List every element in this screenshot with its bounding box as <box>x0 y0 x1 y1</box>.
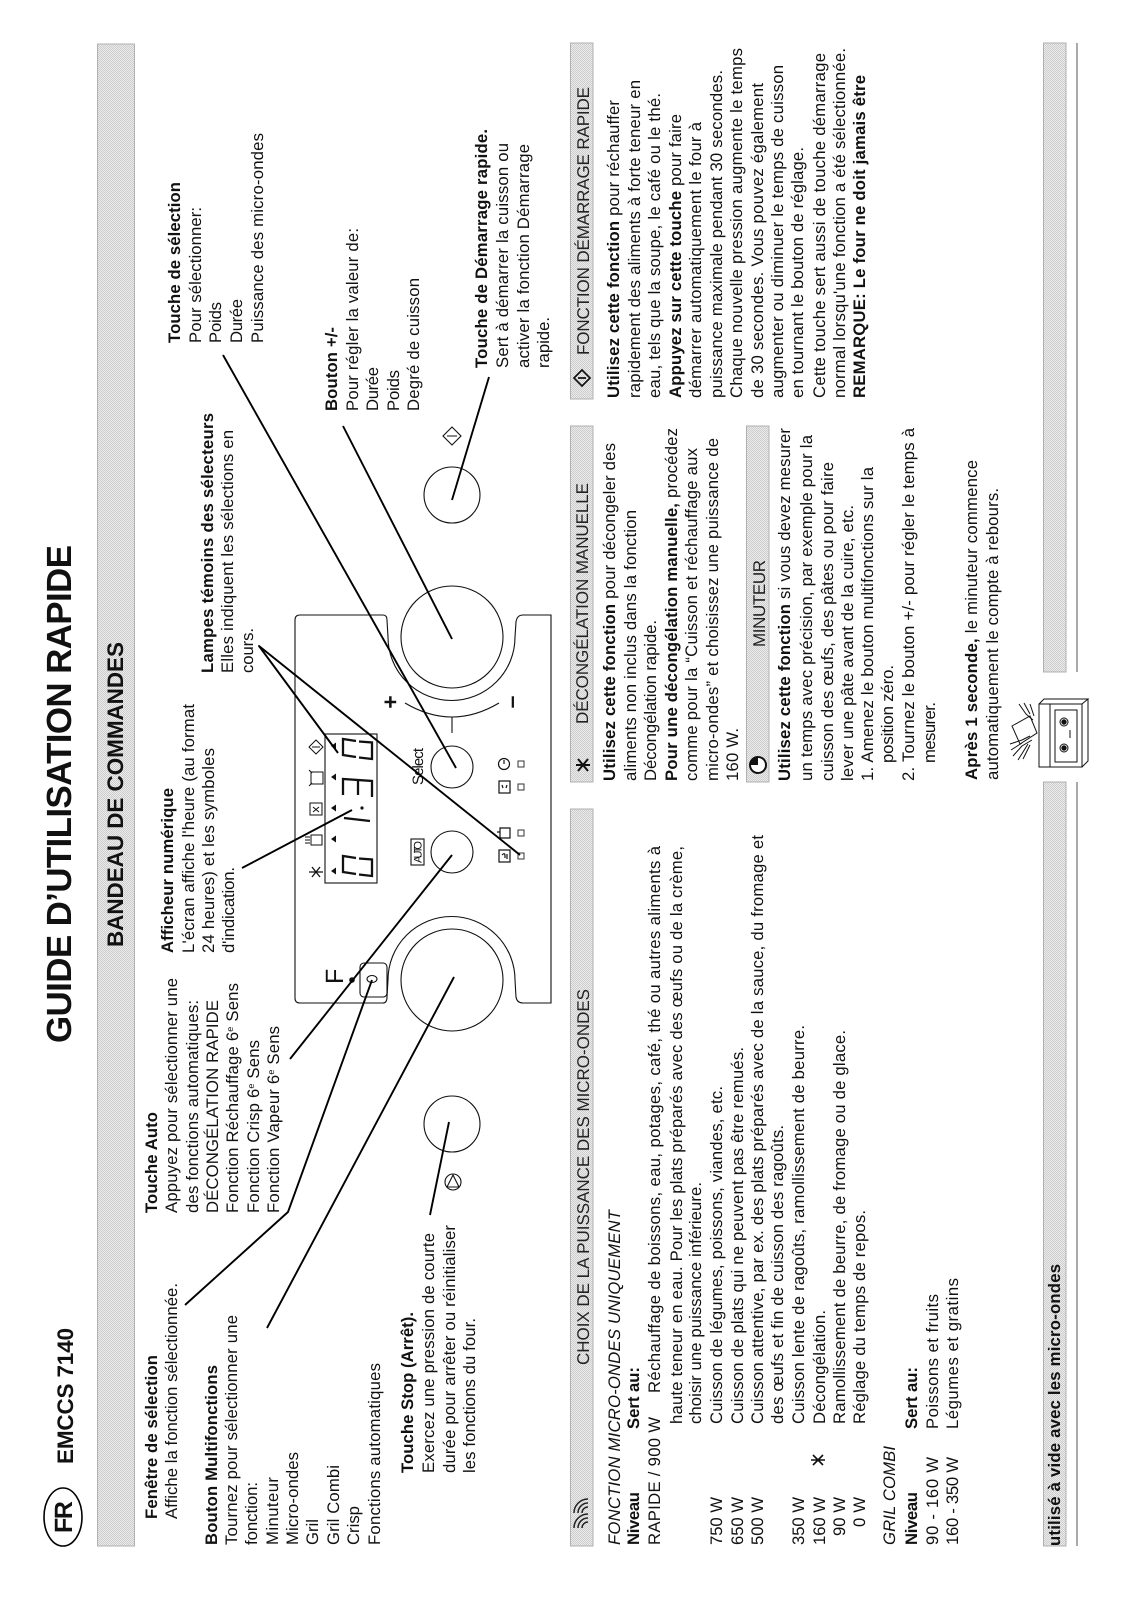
knob: bouton +/- <box>401 586 503 688</box>
text: touche de selection: Poids <box>206 302 225 343</box>
text: fonction demarrage rapide: eau, tels que la soupe, le café ou le thé. <box>645 93 664 398</box>
table: fonction micro-ondes uniquement: Cuisson de légumes, poissons, viandes, etc. <box>707 1086 726 1424</box>
table: fonction micro-ondes uniquement <box>605 835 869 1545</box>
icon: snowflake in table <box>811 1455 825 1465</box>
table: fonction micro-ondes uniquement: 750 W <box>707 1497 726 1545</box>
section bar: decongelation manuelle <box>570 426 593 782</box>
text: lampes temoins: Elles indiquent les sélections en <box>218 430 237 673</box>
table: fonction micro-ondes uniquement: haute teneur en eau. Pour les plats préparés avec des œufs ou de la crème, <box>667 846 686 1424</box>
table: fonction micro-ondes uniquement: Réchauffage de boissons, eau, potages, café, thé ou autres aliments à <box>645 845 664 1393</box>
text: touche de demarrage rapide: activer la fonction Démarrage <box>514 144 533 368</box>
text: bouton +/-: Pour régler la valeur de: <box>343 228 362 411</box>
text: touche de demarrage rapide: rapide. <box>534 317 553 368</box>
text: fonction demarrage rapide: rapidement des aliments à forte teneur en <box>625 80 644 398</box>
leader lines <box>185 355 520 1328</box>
title: GUIDE D’UTILISATION RAPIDE <box>40 545 79 1043</box>
table: gril combi: Niveau <box>902 1492 921 1545</box>
text: fonction demarrage rapide: augmenter ou diminuer le temps de cuisson <box>768 65 787 398</box>
model number: EMCCS 7140 <box>53 1328 78 1464</box>
text: minuteur: position zéro. <box>878 665 897 763</box>
table: gril combi: Poissons et fruits <box>923 1294 942 1429</box>
text: touche de selection: Touche de sélection <box>165 182 184 343</box>
section bar: fonction demarrage rapide <box>570 43 593 399</box>
badge: FR: FR <box>50 1501 78 1533</box>
text: touche stop: les fonctions du four. <box>460 1318 479 1473</box>
text: touche auto: Touche Auto <box>142 1112 161 1213</box>
text: minuteur: automatiquement le compte à rebours. <box>983 488 1002 780</box>
text: lampes temoins: cours. <box>238 628 257 673</box>
text: bouton multifonctions: Gril Combi <box>324 1465 343 1545</box>
text: fonction demarrage rapide: Chaque nouvelle pression augmente le temps <box>727 48 746 398</box>
text: bouton +/- <box>322 228 423 411</box>
text: touche auto: e <box>246 1084 256 1089</box>
control panel diagram <box>295 427 551 1190</box>
table: fonction micro-ondes uniquement: des œufs et fin de cuisson des ragoûts. <box>768 1125 787 1424</box>
text: minuteur: Utilisez cette fonction si vous devez mesurer <box>775 428 794 781</box>
text: touche auto: Sens <box>264 1026 283 1069</box>
quick start button <box>424 427 480 523</box>
table: fonction micro-ondes uniquement: 350 W <box>789 1497 808 1545</box>
text: fenetre de selection: Affiche la fonction sélectionnée. <box>162 1283 181 1519</box>
text: decongelation manuelle <box>600 428 742 781</box>
text: decongelation manuelle: Pour une décongélation manuelle, procédez <box>662 428 681 781</box>
table: fonction micro-ondes uniquement: 0 W <box>850 1497 869 1527</box>
text: afficheur numerique: d'indication. <box>219 867 238 953</box>
text: bouton multifonctions: fonction: <box>242 1482 261 1545</box>
table: fonction micro-ondes uniquement: Ramollissement de beurre, de fromage ou de glace. <box>830 1030 849 1424</box>
text: touche auto: Sens <box>223 983 242 1026</box>
text: bouton multifonctions <box>202 1315 384 1545</box>
text: afficheur numerique: Afficheur numérique <box>158 788 177 953</box>
text: afficheur numerique: L'écran affiche l'heure (au format <box>179 704 198 953</box>
heading: minuteur: MINUTEUR <box>750 560 769 647</box>
text: minuteur: 1. Amenez le bouton multifonctions sur la <box>858 466 877 781</box>
header bar: bandeau de commandes <box>98 44 134 1546</box>
icon: timer <box>750 757 766 773</box>
text: bouton +/-: Degré de cuisson <box>404 278 423 411</box>
text: touche auto: Fonction Crisp 6 <box>244 1089 263 1213</box>
table: fonction micro-ondes uniquement: Réglage du temps de repos. <box>850 1210 869 1424</box>
text: bouton multifonctions: Bouton Multifonctions <box>202 1365 221 1545</box>
text: touche stop: durée pour arrêter ou réinitialiser <box>440 1225 459 1473</box>
digital display <box>325 734 377 883</box>
text: bouton +/-: Bouton +/- <box>322 327 341 411</box>
text: minuteur: 2. Tournez le bouton +/- pour régler le temps à <box>899 427 918 781</box>
text: minuteur: un temps avec précision, par exemple pour la <box>797 434 816 781</box>
table: fonction micro-ondes uniquement: Niveau <box>624 1492 643 1545</box>
table: gril combi: 90 - 160 W <box>923 1457 942 1545</box>
text: fonction demarrage rapide: puissance maximale pendant 30 secondes. <box>707 70 726 398</box>
table: fonction micro-ondes uniquement: Cuisson attentive, par ex. des plats préparés avec de la sauce, du fromage et <box>748 835 767 1424</box>
F label: F <box>321 969 349 984</box>
footer bar <box>1044 43 1078 1546</box>
panel outline <box>295 615 551 1003</box>
text: touche auto: Fonction Vapeur 6 <box>264 1075 283 1213</box>
text: afficheur numerique <box>158 704 238 953</box>
text: touche de selection: Puissance des micro-ondes <box>248 133 267 343</box>
text: fonction demarrage rapide <box>604 48 869 398</box>
text: touche auto: des fonctions automatiques: <box>183 1000 202 1213</box>
text: touche de demarrage rapide <box>472 129 553 368</box>
table: gril combi: GRIL COMBI <box>880 1446 899 1545</box>
text: fonction demarrage rapide: REMARQUE: Le four ne doit jamais être <box>850 75 869 398</box>
text: minuteur: lever une pâte avant de la cuire, etc. <box>838 505 857 781</box>
select label: Select <box>410 747 427 785</box>
text: touche de demarrage rapide: Sert à démarrer la cuisson ou <box>493 143 512 368</box>
text: touche de selection <box>165 133 267 343</box>
selection window <box>349 963 387 997</box>
text: touche auto: Appuyez pour sélectionner une <box>162 978 181 1213</box>
text: bouton +/-: Durée <box>363 367 382 411</box>
table: fonction micro-ondes uniquement: 160 W <box>810 1497 829 1545</box>
table: fonction micro-ondes uniquement: Sert au: <box>624 1367 643 1429</box>
table: fonction micro-ondes uniquement: Cuisson de plats qui ne peuvent pas être remués. <box>728 1047 747 1424</box>
table: fonction micro-ondes uniquement: FONCTION MICRO-ONDES UNIQUEMENT <box>605 1208 624 1545</box>
table: fonction micro-ondes uniquement: RAPIDE / 900 W <box>645 1417 664 1545</box>
table: fonction micro-ondes uniquement: choisir une puissance inférieure. <box>686 1182 705 1424</box>
indicator lamps <box>518 761 524 859</box>
icon: microwave waves <box>574 1499 588 1528</box>
text: decongelation manuelle: 160 W. <box>723 728 742 781</box>
text: touche de selection: Durée <box>227 299 246 343</box>
text: touche auto <box>142 978 283 1213</box>
text: touche stop: Touche Stop (Arrêt). <box>398 1312 417 1473</box>
table: fonction micro-ondes uniquement: 500 W <box>748 1497 767 1545</box>
text: touche auto: DÉCONGÉLATION RAPIDE <box>203 1000 222 1213</box>
text: lampes temoins: Lampes témoins des sélecteurs <box>198 413 217 673</box>
adjust arc <box>405 703 499 733</box>
text: touche stop: Exercez une pression de courte <box>419 1233 438 1473</box>
text: bouton multifonctions: Crisp <box>344 1506 363 1545</box>
text: fonction demarrage rapide: Appuyez sur cette touche pour faire <box>666 114 685 398</box>
table: gril combi <box>880 1278 962 1545</box>
badge: FR <box>44 1488 82 1546</box>
auto button <box>431 831 473 873</box>
heading: decongelation manuelle: DÉCONGÉLATION MANUELLE <box>573 483 592 724</box>
heading: choix de la puissance: CHOIX DE LA PUISSANCE DES MICRO-ONDES <box>574 989 593 1365</box>
text: lampes temoins <box>198 413 257 673</box>
text: touche auto: e <box>225 1027 235 1032</box>
text: decongelation manuelle: Décongélation rapide. <box>641 620 660 781</box>
stop button <box>424 1096 480 1190</box>
table: gril combi: 160 - 350 W <box>943 1457 962 1545</box>
select button <box>431 746 473 788</box>
table: fonction micro-ondes uniquement: 90 W <box>830 1497 849 1536</box>
text: decongelation manuelle: aliments non inclus dans la fonction <box>621 510 640 781</box>
text: fonction demarrage rapide: de 30 secondes. Vous pouvez également <box>748 83 767 398</box>
text: touche auto: Sens <box>244 1040 263 1083</box>
icon: snowflake header <box>576 759 590 771</box>
text: afficheur numerique: 24 heures) et les symboles <box>199 748 218 953</box>
table: gril combi: Légumes et gratins <box>943 1278 962 1429</box>
text: fenetre de selection: Fenêtre de sélection <box>142 1355 161 1519</box>
text: bouton multifonctions: Minuteur <box>263 1477 282 1545</box>
text: touche stop <box>398 1225 479 1473</box>
section bar: choix de la puissance <box>570 809 593 1546</box>
minus sign: – <box>498 695 524 708</box>
text: touche de demarrage rapide: Touche de Démarrage rapide. <box>472 129 491 368</box>
text: minuteur: cuisson des œufs, des pâtes ou pour faire <box>818 462 837 781</box>
display symbols <box>305 740 323 877</box>
heading: fonction demarrage rapide: FONCTION DÉMARRAGE RAPIDE <box>574 87 593 355</box>
text: decongelation manuelle: comme pour la “Cuisson et réchauffage aux <box>682 447 701 781</box>
text: fenetre de selection <box>142 1283 181 1519</box>
footer text: utilisé à vide avec les micro-ondes <box>1045 1264 1064 1546</box>
text: fonction demarrage rapide: en tournant le bouton de réglage. <box>788 147 807 398</box>
text: bouton multifonctions: Gril <box>303 1519 322 1545</box>
text: decongelation manuelle: micro-ondes” et choisissez une puissance de <box>703 438 722 781</box>
text: fonction demarrage rapide: Utilisez cette fonction pour réchauffer <box>604 100 623 398</box>
text: bouton multifonctions: Fonctions automatiques <box>365 1363 384 1545</box>
text: fonction demarrage rapide: démarrer automatiquement le four à <box>686 121 705 398</box>
text: fonction demarrage rapide: Cette touche sert aussi de touche démarrage <box>810 53 829 398</box>
text: bouton multifonctions: Tournez pour sélectionner une <box>222 1315 241 1545</box>
text: fonction demarrage rapide: normal lorsqu'une fonction a été sélectionnée. <box>830 48 849 398</box>
section bar: minuteur <box>746 426 769 782</box>
knob: multifonctions <box>401 929 503 1031</box>
lamp icons <box>497 758 510 862</box>
text: decongelation manuelle: Utilisez cette fonction pour décongeler des <box>600 443 619 781</box>
text: touche de selection: Pour sélectionner: <box>186 207 205 343</box>
text: bouton +/-: Poids <box>384 370 403 411</box>
icon: start diamond <box>574 370 590 386</box>
table: gril combi: Sert au: <box>902 1367 921 1429</box>
text: touche auto: e <box>266 1070 276 1075</box>
text: bouton multifonctions: Micro-ondes <box>283 1452 302 1545</box>
text: touche auto: Fonction Réchauffage 6 <box>223 1032 242 1213</box>
table: fonction micro-ondes uniquement: 650 W <box>728 1497 747 1545</box>
heading: bandeau de commandes: BANDEAU DE COMMANDES <box>103 642 128 947</box>
table: fonction micro-ondes uniquement: Cuisson lente de ragoûts, ramollissement de beurre. <box>789 1025 808 1424</box>
illustration: microwave and hands <box>1010 699 1088 767</box>
text: minuteur: Après 1 seconde, le minuteur commence <box>962 460 981 780</box>
auto label: AUTO <box>412 841 424 863</box>
text: minuteur <box>775 427 1002 781</box>
text: minuteur: mesurer. <box>920 702 939 763</box>
table: fonction micro-ondes uniquement: Décongélation. <box>810 1310 829 1424</box>
plus sign: + <box>377 695 403 709</box>
